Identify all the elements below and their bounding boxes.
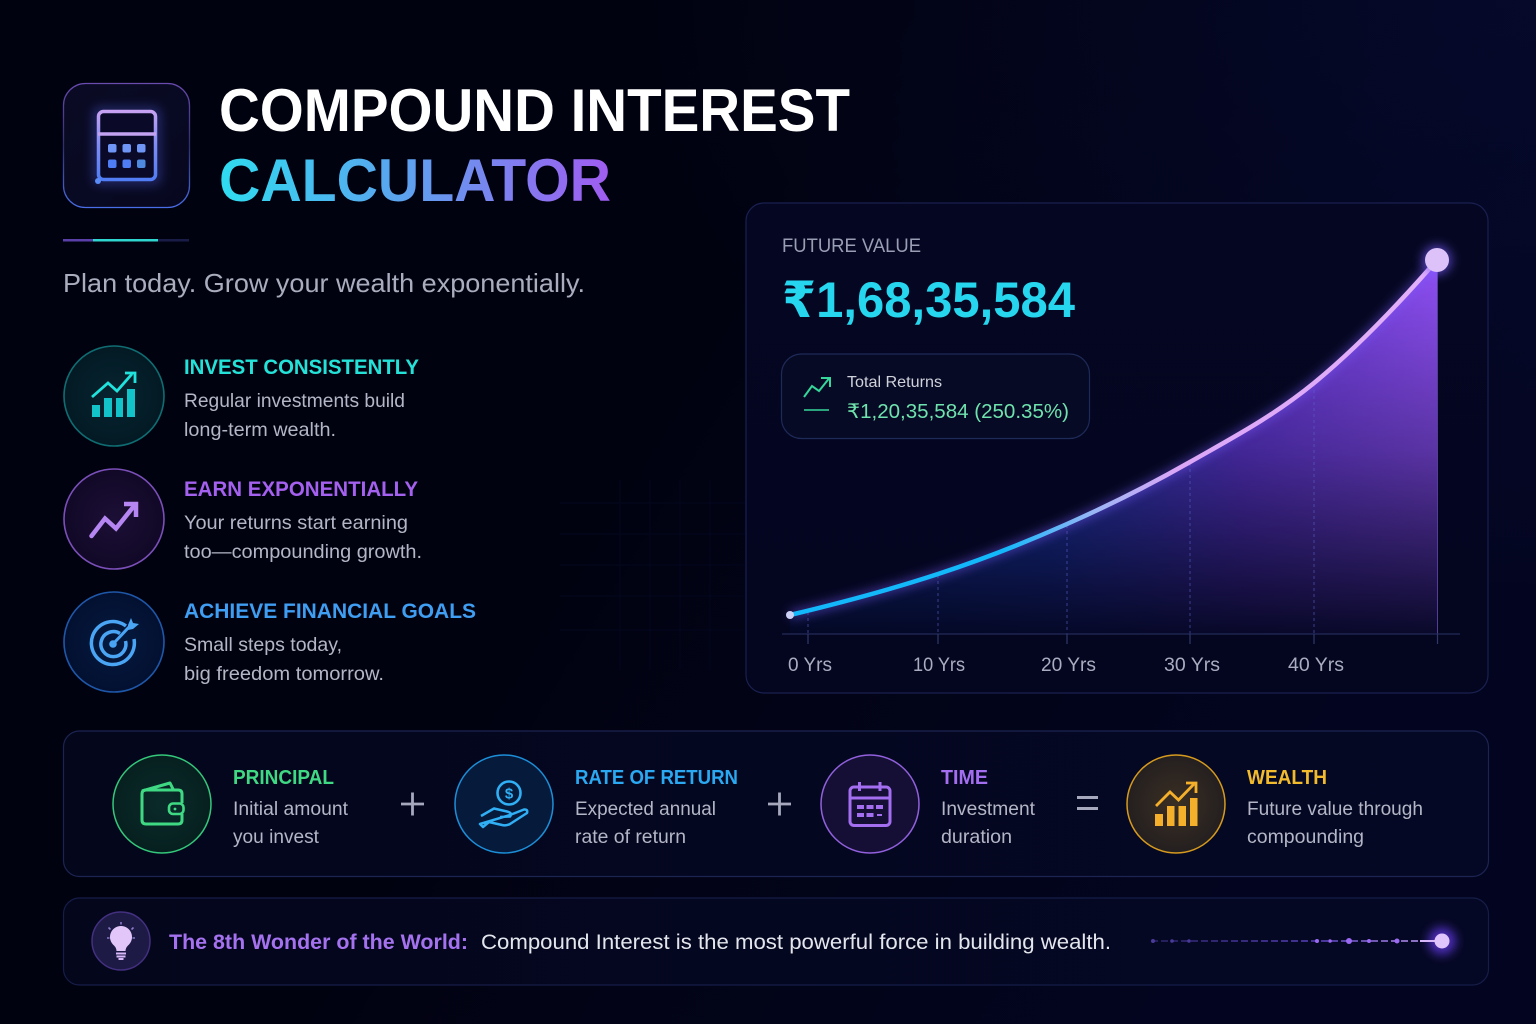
formula: time: TIME <box>941 767 988 789</box>
growth progress line <box>1151 927 1456 955</box>
axis labels: 30 Yrs <box>1164 655 1220 676</box>
plus sign <box>401 792 424 816</box>
formula: principal: PRINCIPAL <box>233 767 334 789</box>
icon: wallet <box>113 755 211 853</box>
icon: calculator tile <box>64 84 190 208</box>
formula: wealth: Future value through <box>1247 798 1423 820</box>
axis labels: 40 Yrs <box>1288 655 1344 676</box>
icon: target <box>64 592 164 692</box>
icon: hand with coin <box>455 755 553 853</box>
callout text: The 8th Wonder of the World: <box>169 931 468 954</box>
formula: time <box>821 755 1036 853</box>
benefit: invest consistently: Regular investments build <box>184 390 405 412</box>
icon: growth bars <box>64 346 164 446</box>
formula: principal <box>113 755 349 853</box>
callout text: Compound Interest is the most powerful force in building wealth. <box>481 931 1111 954</box>
formula: principal: you invest <box>233 826 320 848</box>
tagline: Plan today. Grow your wealth exponentially. <box>63 268 585 298</box>
benefit: earn exponentially: too—compounding growth. <box>184 541 422 563</box>
benefit: achieve financial goals: ACHIEVE FINANCIAL GOALS <box>184 600 476 623</box>
benefit: achieve financial goals <box>64 592 476 692</box>
axis labels <box>788 655 1344 676</box>
formula: time: Investment <box>941 798 1036 820</box>
panel: callout strip <box>64 898 1488 985</box>
axis labels: 0 Yrs <box>788 655 832 676</box>
benefit: earn exponentially: Your returns start earning <box>184 512 408 534</box>
formula: rate of return <box>455 755 738 853</box>
icon: calendar <box>821 755 919 853</box>
formula: wealth: compounding <box>1247 826 1364 848</box>
total returns card: Total Returns <box>847 374 942 391</box>
line chart <box>782 245 1460 676</box>
formula: wealth: WEALTH <box>1247 767 1327 789</box>
axis labels: 10 Yrs <box>913 655 965 676</box>
icon: hand with coin: $ <box>505 786 514 802</box>
title: CALCULATOR <box>219 147 611 214</box>
total returns card: ₹1,20,35,584 (250.35%) <box>847 401 1069 423</box>
total returns card <box>782 354 1090 438</box>
icon: gold growth bars <box>1127 755 1225 853</box>
title: COMPOUND INTEREST <box>219 77 850 144</box>
equals sign <box>1077 798 1098 808</box>
benefit: achieve financial goals: Small steps today, <box>184 634 342 656</box>
panel: formula strip <box>64 731 1488 876</box>
benefit: invest consistently: INVEST CONSISTENTLY <box>184 356 419 379</box>
axis labels: 20 Yrs <box>1041 655 1096 676</box>
icon: trend arrow <box>64 469 164 569</box>
benefit: achieve financial goals: big freedom tomorrow. <box>184 663 384 685</box>
formula: rate of return: RATE OF RETURN <box>575 767 738 789</box>
plus sign <box>768 792 791 816</box>
benefit: earn exponentially: EARN EXPONENTIALLY <box>184 478 418 501</box>
title <box>219 77 850 214</box>
benefit: earn exponentially <box>64 469 422 569</box>
future value label: FUTURE VALUE <box>782 236 921 257</box>
formula: rate of return: rate of return <box>575 826 686 848</box>
callout text <box>169 931 1111 954</box>
formula: principal: Initial amount <box>233 798 349 820</box>
formula: wealth <box>1127 755 1423 853</box>
benefit: invest consistently: long-term wealth. <box>184 419 336 441</box>
panel: future value chart <box>746 203 1488 693</box>
formula: rate of return: Expected annual <box>575 798 716 820</box>
future value amount: ₹1,68,35,584 <box>782 272 1075 328</box>
benefit: invest consistently <box>64 346 419 446</box>
formula: time: duration <box>941 826 1012 848</box>
icon: light bulb <box>92 912 150 970</box>
